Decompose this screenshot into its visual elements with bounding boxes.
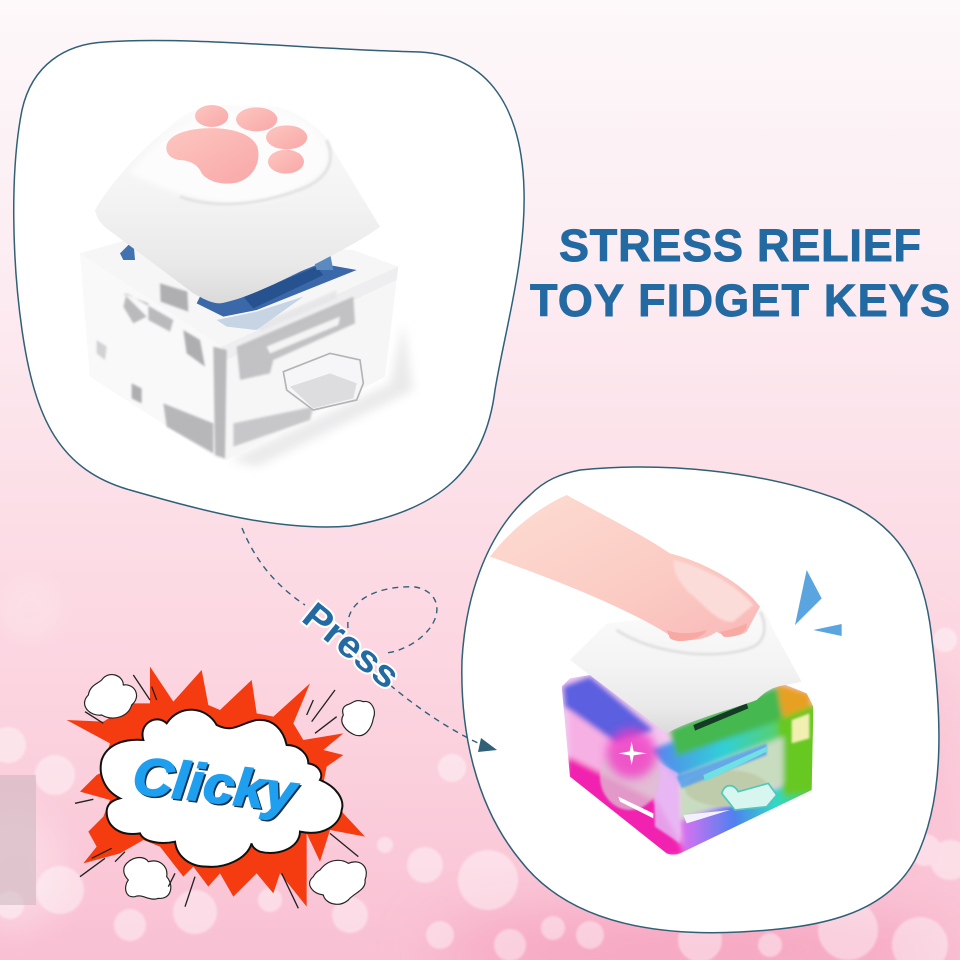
icon: blue stem: [120, 240, 357, 330]
panel: finger press blob: [462, 467, 939, 933]
press label: Press: [295, 594, 408, 697]
icon: paw keycap switch: [80, 105, 413, 467]
title: TOY FIDGET KEYS: [530, 275, 950, 326]
icon: finger: [490, 495, 760, 640]
panel: top keycap blob: [14, 41, 524, 527]
icon: clicky burst: [67, 667, 374, 908]
action lines: [75, 675, 358, 908]
clicky label: Clicky: [130, 746, 302, 824]
title: STRESS RELIEF: [559, 220, 921, 271]
side smudge: [0, 775, 36, 905]
icon: white keycap: [95, 105, 380, 303]
icon: keycap under finger: [570, 607, 802, 733]
icon: rainbow switch: [557, 670, 820, 860]
icon: speech cloud: [101, 710, 342, 867]
clicky label shadow: Clicky: [132, 748, 303, 825]
arrow head: [478, 738, 497, 752]
icon: paw print: [166, 105, 307, 184]
title: [530, 220, 950, 326]
icon: clear housing: [80, 240, 398, 460]
icon: finger pressing rainbow switch: [490, 495, 842, 860]
icon: fingernail: [673, 560, 753, 622]
icon: blue click marks: [795, 570, 842, 636]
icon: small clouds: [85, 675, 374, 904]
arrow: dashed path from top to bottom blob: [242, 528, 484, 746]
shadow: [230, 323, 413, 467]
icon: finger pads: [667, 623, 747, 641]
